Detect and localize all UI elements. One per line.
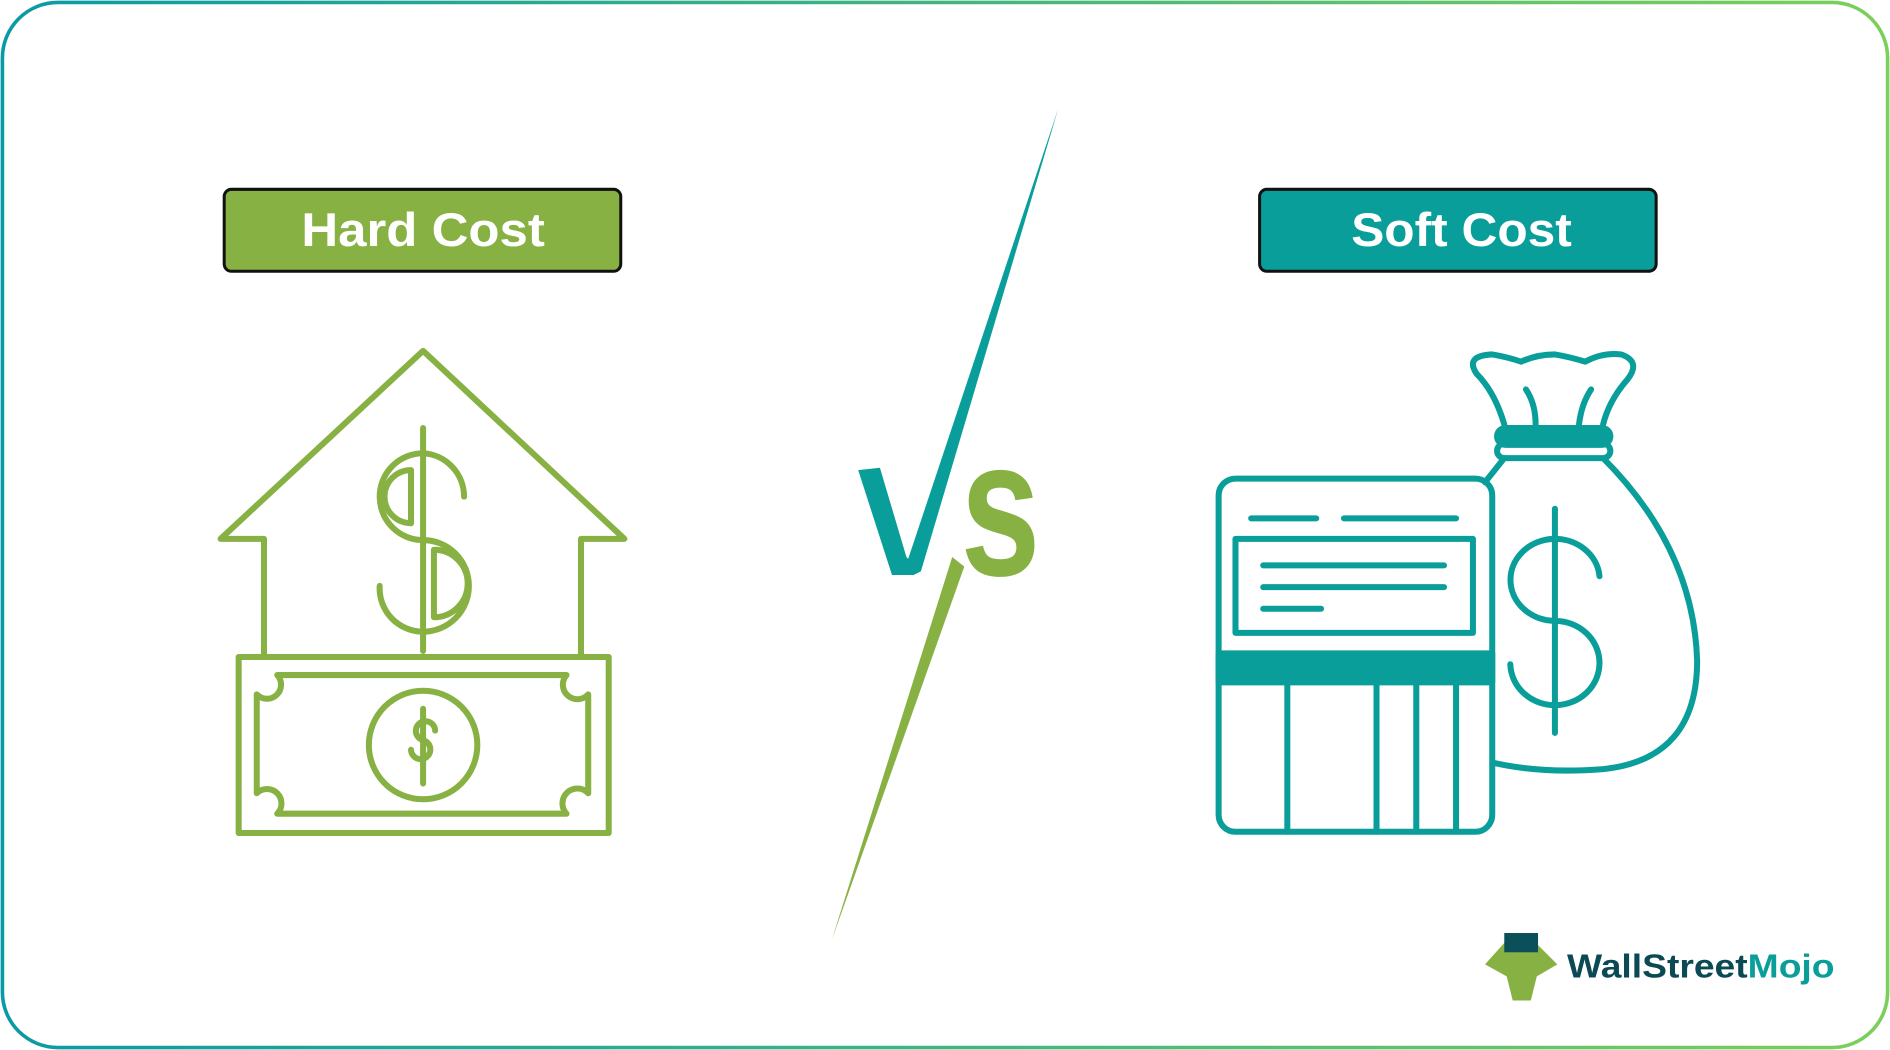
title: Soft Cost [1260,189,1656,271]
title: Hard Cost: Hard Cost [301,203,545,256]
divider slash and VS: s [961,399,1040,617]
title: Hard Cost [224,189,621,271]
title: Soft Cost: Soft Cost [1351,203,1572,256]
logo: WallStreetMojo: WallStreet Mojo [1567,948,1835,986]
icon: house with dollar [221,351,624,833]
divider slash and VS [832,109,1058,940]
logo: WallStreetMojo [1485,933,1835,1001]
icon: ledger and money bag [1219,354,1697,832]
